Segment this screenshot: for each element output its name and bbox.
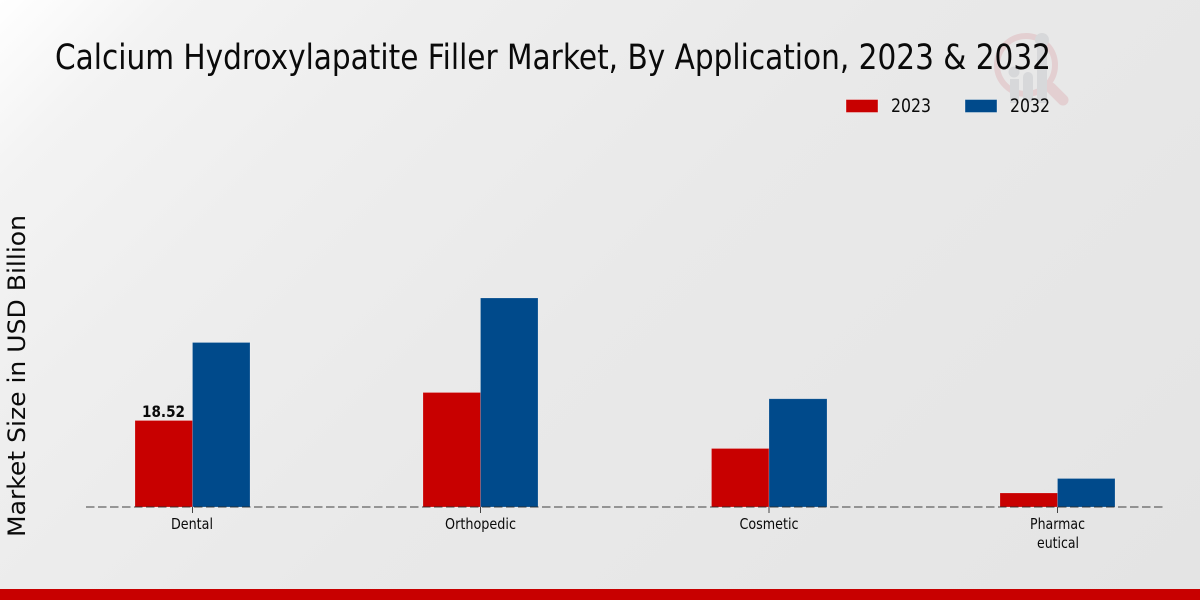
category label: Pharmaceutical: Pharmac xyxy=(1030,515,1085,533)
legend item: 2023 xyxy=(846,95,931,117)
title: Calcium Hydroxylapatite Filler Market, By Application, 2023 & 2032 xyxy=(55,38,1051,78)
bars: Cosmetic xyxy=(712,399,827,507)
category label: Orthopedic: Orthopedic xyxy=(445,515,516,533)
bar chart xyxy=(86,298,1164,552)
legend item: 2023: 2023 xyxy=(891,95,931,117)
category label: Pharmaceutical xyxy=(1030,515,1085,552)
bars: Orthopedic xyxy=(423,298,538,507)
legend item: 2032: 2032 xyxy=(1010,95,1050,117)
legend xyxy=(846,95,1050,117)
icon: watermark magnifier with bars xyxy=(997,33,1063,103)
footer bar xyxy=(0,589,1200,600)
category label: Pharmaceutical: eutical xyxy=(1037,534,1079,552)
y axis label: Market Size in USD Billion xyxy=(3,215,31,537)
legend item: 2032 xyxy=(965,95,1050,117)
bars: Dental xyxy=(135,342,250,507)
x axis baseline xyxy=(86,506,1164,508)
data label: 18.52: 18.52 xyxy=(142,402,185,421)
category label: Cosmetic: Cosmetic xyxy=(740,515,798,533)
category label: Dental: Dental xyxy=(171,515,213,533)
bars: Pharmaceutical xyxy=(1000,478,1115,507)
